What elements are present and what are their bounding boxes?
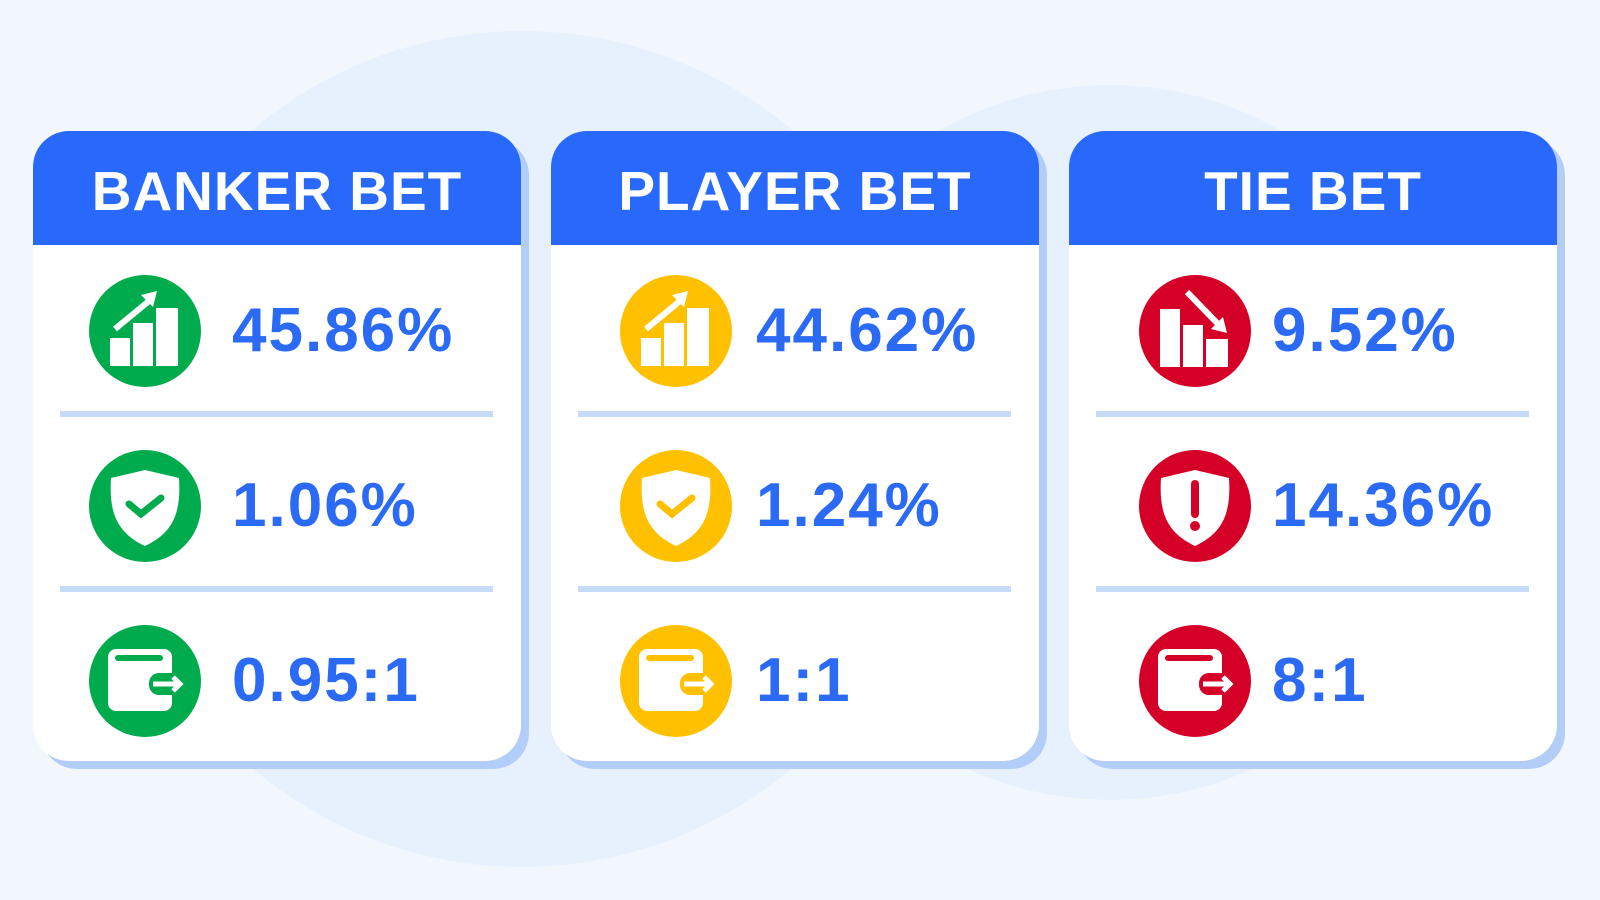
icon: wallet bbox=[620, 625, 732, 737]
value: 45.86% bbox=[232, 296, 454, 365]
heading: tie bet: TIE BET bbox=[1204, 160, 1422, 222]
heading: tie bet bbox=[1069, 131, 1557, 245]
row: payout bbox=[89, 625, 420, 737]
row: win probability bbox=[620, 275, 978, 387]
icon: shield check bbox=[89, 450, 201, 562]
icon: wallet bbox=[89, 625, 201, 737]
panel: tie bet bbox=[1069, 131, 1557, 761]
value: 9.52% bbox=[1272, 296, 1458, 365]
icon: chart up bbox=[620, 275, 732, 387]
value: 8:1 bbox=[1272, 646, 1368, 715]
value: 1.06% bbox=[232, 471, 418, 540]
icon: shield check bbox=[620, 450, 732, 562]
panel: player bet bbox=[551, 131, 1039, 761]
row: house edge bbox=[89, 450, 418, 562]
row: payout bbox=[620, 625, 852, 737]
value: 0.95:1 bbox=[232, 646, 420, 715]
icon: wallet bbox=[1139, 625, 1251, 737]
row: house edge bbox=[1139, 450, 1494, 562]
row: house edge bbox=[620, 450, 942, 562]
icon: shield alert bbox=[1139, 450, 1251, 562]
value: 44.62% bbox=[756, 296, 978, 365]
row: win probability bbox=[89, 275, 454, 387]
heading: banker bet bbox=[33, 131, 521, 245]
value: 1:1 bbox=[756, 646, 852, 715]
value: 1.24% bbox=[756, 471, 942, 540]
icon: chart down bbox=[1139, 275, 1251, 387]
panel: banker bet bbox=[33, 131, 521, 761]
row: win probability bbox=[1139, 275, 1458, 387]
heading: player bet: PLAYER BET bbox=[618, 160, 972, 222]
heading: banker bet: BANKER BET bbox=[92, 160, 462, 222]
heading: player bet bbox=[551, 131, 1039, 245]
value: 14.36% bbox=[1272, 471, 1494, 540]
icon: chart up bbox=[89, 275, 201, 387]
row: payout bbox=[1139, 625, 1368, 737]
